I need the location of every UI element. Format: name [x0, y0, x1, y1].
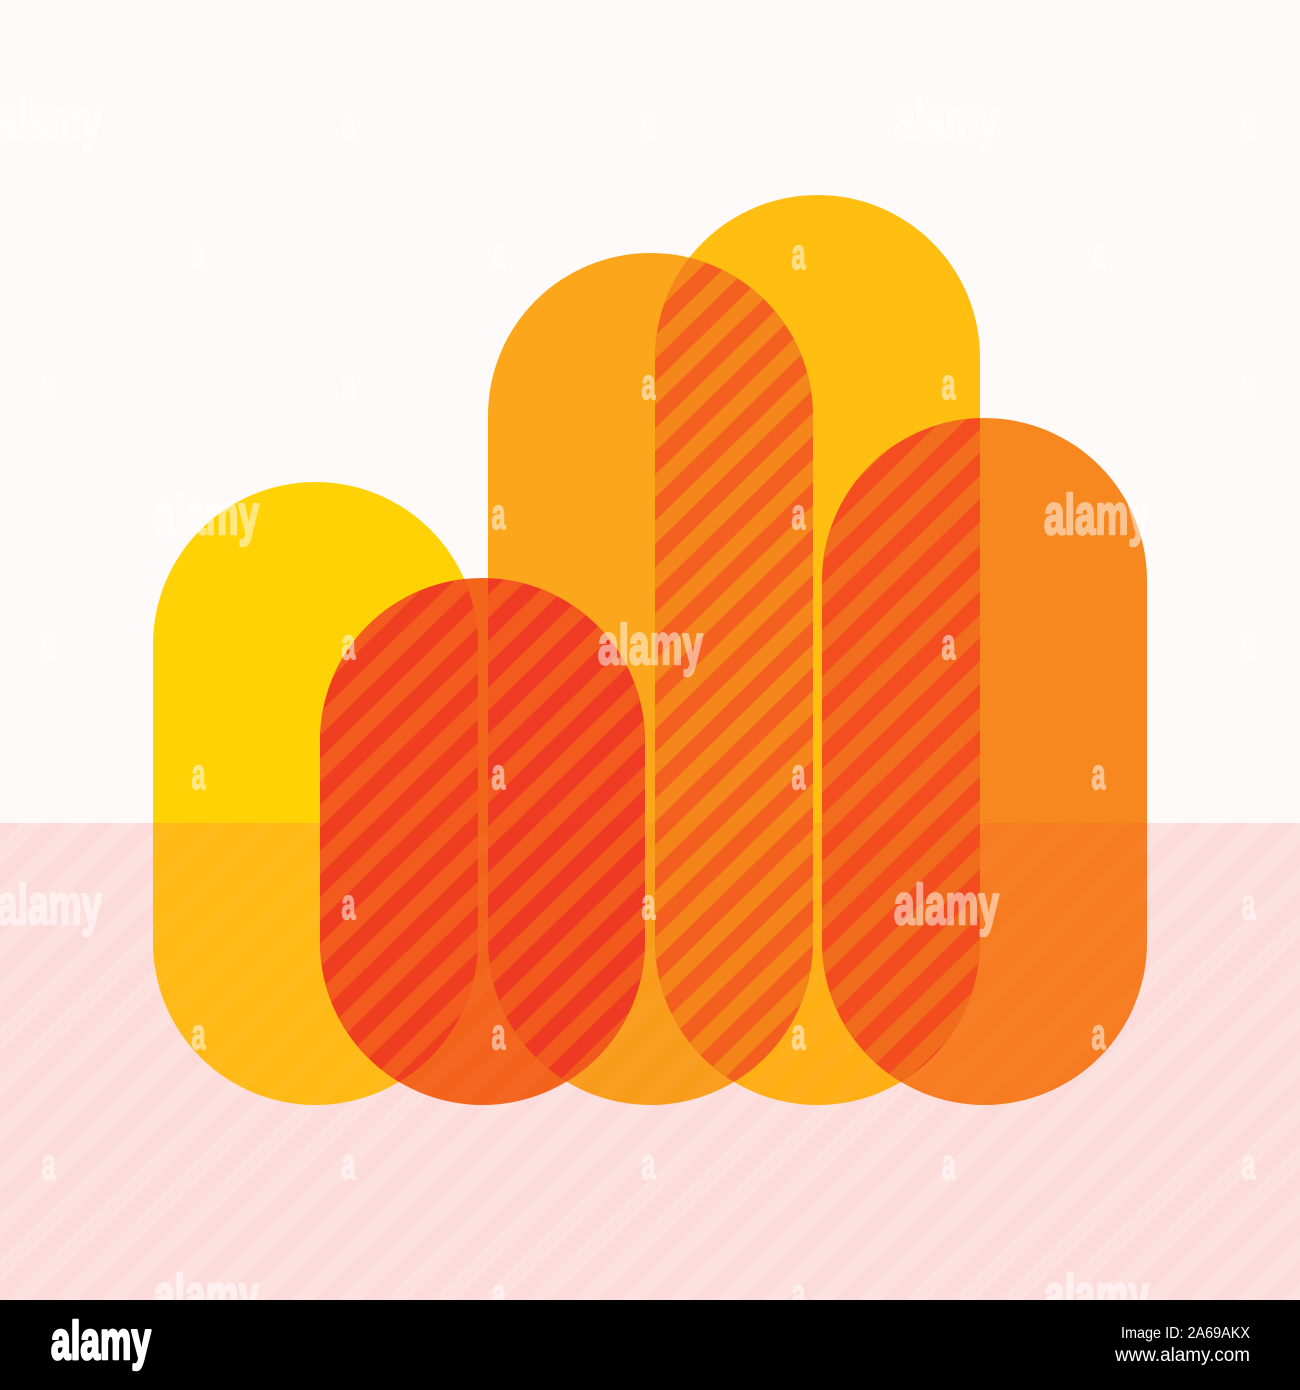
- watermark: large word grid: alamy: [598, 613, 703, 677]
- watermark: large word grid: alamy: [1044, 1263, 1149, 1327]
- watermark: small letter grid: a: [642, 100, 656, 149]
- watermark: small letter grid: a: [192, 230, 206, 279]
- pill: golden, fourth column: [689, 195, 980, 1105]
- pill: orange, fifth column: [822, 418, 1147, 1105]
- watermark: large word grid: alamy: [0, 873, 102, 937]
- pill: yellow, first column: [153, 482, 478, 1105]
- watermark: small letter grid: a: [1092, 1010, 1106, 1059]
- overlap: red and amber striped lens: [488, 578, 645, 1082]
- background: striped pink floor: [0, 823, 1300, 1300]
- background: upper wall: [0, 0, 1300, 823]
- watermark: small letter grid: a: [642, 360, 656, 409]
- watermark: small letter grid: a: [792, 230, 806, 279]
- footer logo: alamy: [51, 1311, 151, 1371]
- website: www.alamy.com: [1114, 1345, 1250, 1366]
- watermark: large word grid: [0, 88, 1149, 1327]
- watermark: small letter grid: a: [1242, 620, 1256, 669]
- watermark: large word grid: alamy: [154, 483, 259, 547]
- watermark: small letter grid: a: [1242, 100, 1256, 149]
- watermark: small letter grid: a: [492, 230, 506, 279]
- faint stripes on pills below the floor line: [0, 823, 1300, 1123]
- watermark: small letter grid: a: [642, 1140, 656, 1189]
- watermark: small letter grid: a: [942, 620, 956, 669]
- footer bar: [0, 1300, 1300, 1390]
- watermark: small letter grid: a: [1092, 750, 1106, 799]
- watermark: small letter grid: a: [192, 750, 206, 799]
- watermark: small letter grid: a: [192, 1010, 206, 1059]
- watermark: small letter grid: a: [42, 1140, 56, 1189]
- watermark: small letter grid: a: [42, 620, 56, 669]
- image id: Image ID: 2A69AKX: [1121, 1325, 1250, 1342]
- pill: amber, third column: [488, 253, 734, 1105]
- watermark: small letter grid: a: [342, 620, 356, 669]
- watermark: small letter grid: a: [492, 1270, 506, 1319]
- watermark: small letter grid: a: [342, 360, 356, 409]
- watermark: small letter grid: a: [342, 1140, 356, 1189]
- watermark: large word grid: alamy: [894, 88, 999, 152]
- watermark: large word grid: alamy: [154, 1263, 259, 1327]
- pill: red, second column: [320, 578, 566, 1105]
- watermark: large word grid: alamy: [0, 88, 102, 152]
- watermark: small letter grid: a: [792, 490, 806, 539]
- watermark: small letter grid: a: [492, 750, 506, 799]
- watermark: small letter grid: a: [492, 490, 506, 539]
- watermark: large word grid: alamy: [894, 873, 999, 937]
- watermark: small letter grid: a: [1242, 880, 1256, 929]
- watermark: large word grid: alamy: [1044, 483, 1149, 547]
- watermark: small letter grid: a: [942, 360, 956, 409]
- overlap: yellow and red striped lens: [320, 579, 478, 1082]
- watermark: small letter grid: a: [1242, 360, 1256, 409]
- watermark: small letter grid: a: [342, 100, 356, 149]
- watermark: small letter grid: a: [1092, 230, 1106, 279]
- overlap: amber and golden striped lens: [655, 258, 813, 1082]
- watermark: small letter grid: a: [942, 1140, 956, 1189]
- watermark: small letter grid: a: [1242, 1140, 1256, 1189]
- watermark: small letter grid: a: [42, 360, 56, 409]
- watermark: small letter grid: a: [792, 1010, 806, 1059]
- overlap: golden and orange striped lens: [822, 418, 980, 1082]
- watermark: small letter grid: a: [792, 750, 806, 799]
- watermark: small letter grid: a: [492, 1010, 506, 1059]
- watermark: small letter grid: a: [792, 1270, 806, 1319]
- watermark: small letter grid: a: [342, 880, 356, 929]
- watermark: small letter grid: a: [642, 880, 656, 929]
